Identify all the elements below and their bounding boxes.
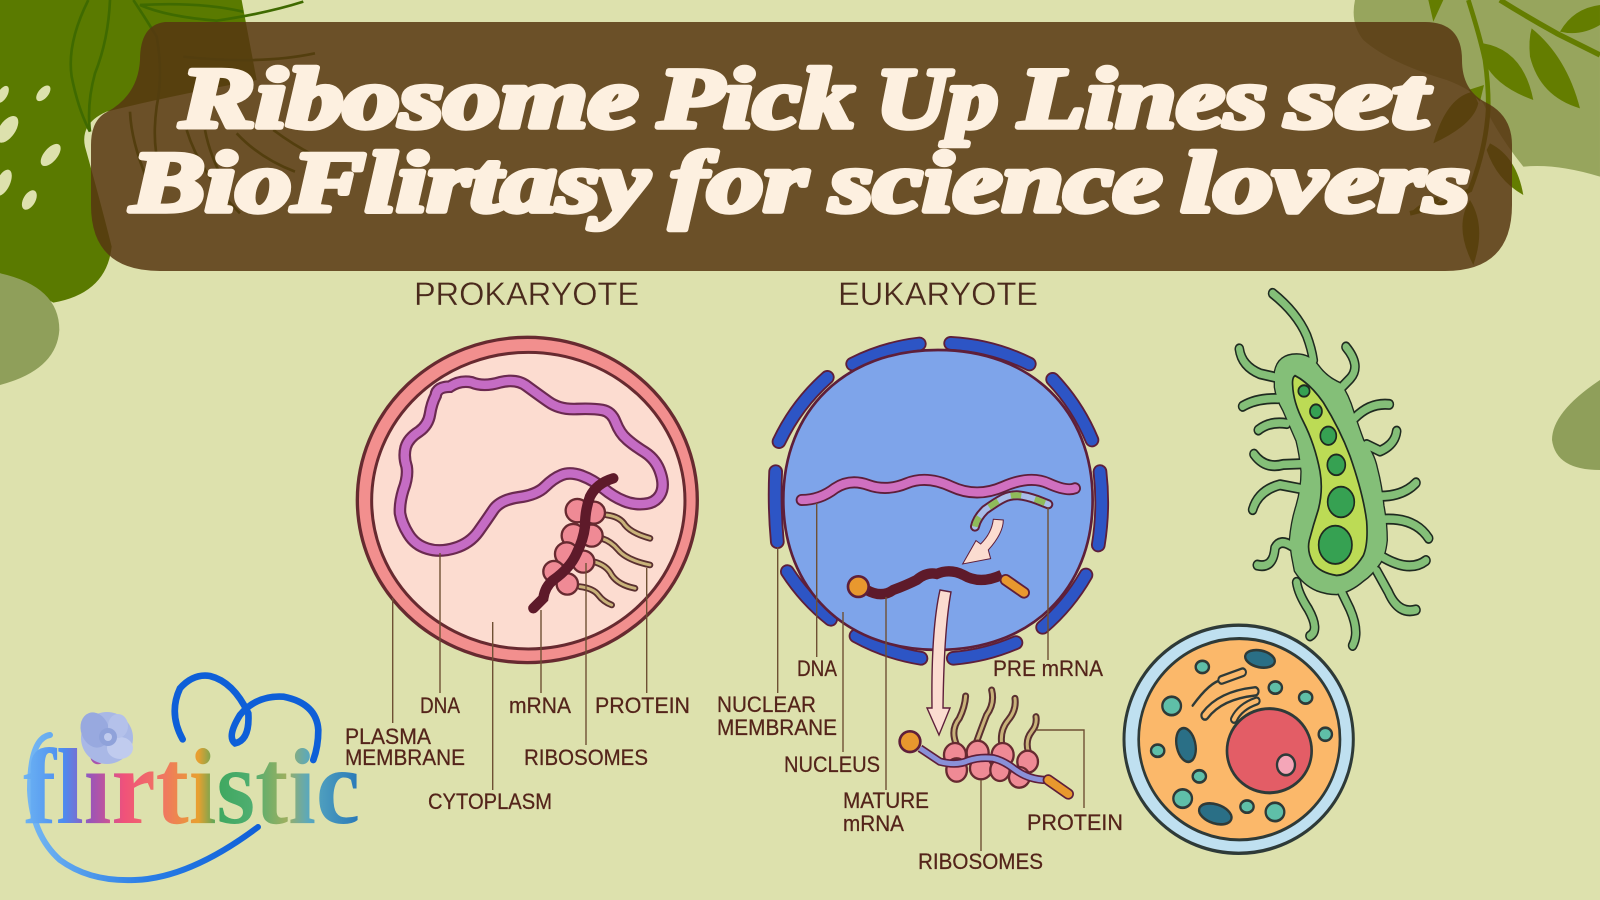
strand	[920, 748, 1047, 780]
title: BioFlirtasy	[130, 134, 650, 230]
poly-A tail	[1048, 780, 1068, 794]
prokaryote labels: PROTEIN	[595, 693, 690, 718]
eukaryote labels: NUCLEUS	[784, 752, 880, 777]
prokaryote labels: mRNA	[509, 693, 571, 718]
nucleus	[1227, 709, 1312, 793]
inner vacuole	[1293, 376, 1367, 575]
arrow: pre mRNA to mature mRNA	[963, 519, 1003, 564]
golgi	[1193, 672, 1257, 719]
mitochondria	[1173, 648, 1276, 828]
logo rose	[76, 708, 133, 764]
proteins	[580, 515, 650, 605]
heading: eukaryote: EUKARYOTE	[838, 276, 1038, 312]
title: Lines	[1018, 50, 1267, 146]
arrow: mature mRNA to ribosomes	[927, 590, 951, 735]
eukaryote labels: NUCLEAR	[717, 692, 816, 717]
eukaryote labels: DNA	[797, 656, 837, 681]
eukaryote labels: MEMBRANE	[717, 715, 837, 740]
bacterium outline	[1239, 293, 1429, 645]
diagram: prokaryote cell	[357, 337, 697, 663]
prokaryote labels	[345, 693, 690, 814]
proteins	[954, 690, 1036, 752]
nucleus	[783, 350, 1093, 650]
eukaryote leader lines	[778, 503, 1084, 851]
eukaryote labels	[717, 656, 1123, 874]
title	[130, 50, 1470, 230]
cell membrane	[1124, 625, 1353, 853]
DNA strand	[802, 480, 1075, 500]
granules	[1298, 385, 1354, 564]
mRNA strand	[533, 478, 613, 608]
eukaryote labels: MATURE	[843, 788, 929, 813]
eukaryote labels: PRE mRNA	[993, 656, 1103, 681]
logo swoosh	[30, 735, 258, 880]
title: lovers	[1181, 134, 1470, 230]
decorative blobs: top left	[0, 0, 315, 385]
decorative blob: right edge	[1552, 380, 1600, 470]
cytoplasm	[372, 352, 685, 649]
nucleolus	[1277, 755, 1295, 775]
logo heart swirl	[175, 676, 318, 760]
title: Up	[876, 50, 998, 146]
prokaryote labels: PLASMA	[345, 724, 431, 749]
cell wall	[357, 337, 697, 663]
ribosomes	[944, 741, 1038, 788]
title: Ribosome	[179, 50, 638, 146]
logo wordmark: flirtistic	[23, 728, 360, 847]
DNA loop	[400, 381, 663, 550]
prokaryote labels: RIBOSOMES	[524, 745, 648, 770]
nuclear membrane segments	[775, 343, 1102, 658]
decorative blobs and leaves: top right	[1354, 0, 1600, 265]
prokaryote labels: MEMBRANE	[345, 745, 465, 770]
prokaryote leader lines	[393, 553, 647, 790]
bacterium body	[1239, 293, 1429, 645]
eukaryote labels: RIBOSOMES	[918, 849, 1043, 874]
cytoplasm	[1139, 639, 1340, 840]
eukaryote labels: PROTEIN	[1027, 810, 1123, 835]
icon: animal cell	[1124, 625, 1353, 853]
mature mRNA	[848, 571, 1024, 597]
title: science	[829, 134, 1162, 230]
logo: flirtistic	[23, 676, 360, 880]
pre mRNA	[975, 495, 1048, 527]
diagram: eukaryote cell	[775, 343, 1102, 658]
vesicles	[1151, 661, 1332, 821]
title: for	[670, 134, 809, 230]
ribosomes	[543, 499, 605, 595]
prokaryote labels: CYTOPLASM	[428, 789, 552, 814]
heading: prokaryote: PROKARYOTE	[414, 276, 639, 312]
5-prime cap	[900, 731, 920, 752]
title: Pick	[657, 50, 854, 146]
eukaryote labels: mRNA	[843, 811, 904, 836]
prokaryote labels: DNA	[420, 693, 460, 718]
translating ribosome complex	[900, 690, 1068, 794]
icon: green bacterium	[1239, 293, 1429, 645]
title: set	[1285, 50, 1432, 146]
title banner	[91, 22, 1512, 271]
